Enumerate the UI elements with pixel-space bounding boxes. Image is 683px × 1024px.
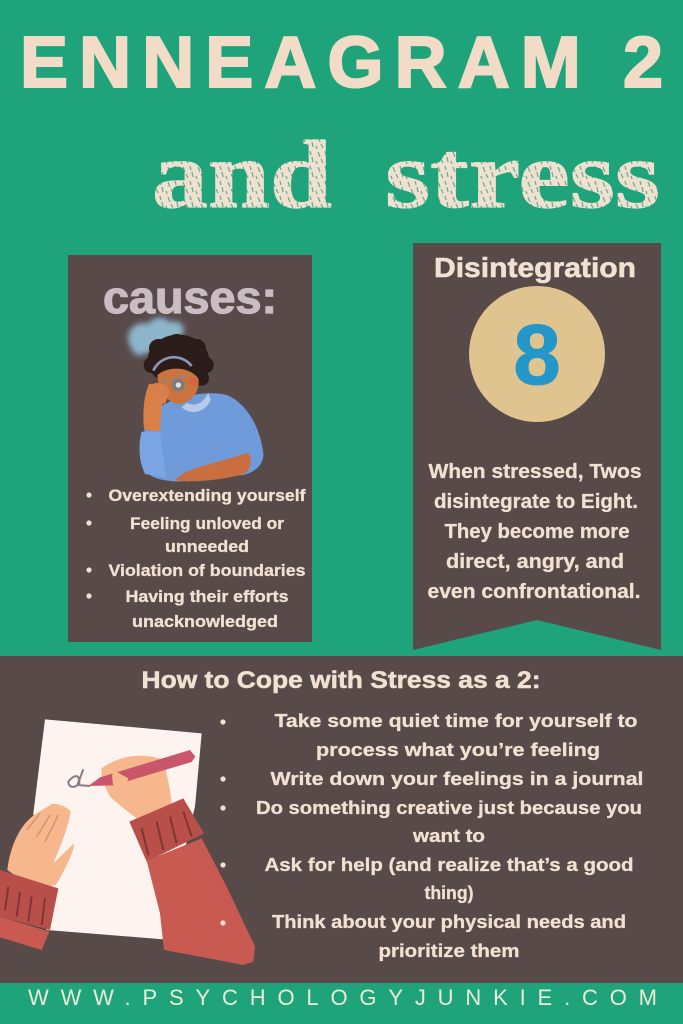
subtitle: and stress: [152, 121, 660, 228]
heading: disintegration: Disintegration: [434, 252, 636, 283]
badge: number 8: [469, 286, 605, 422]
list: coping strategies: Do something creative just because you: [256, 797, 642, 818]
title: Enneagram 2: ENNEAGRAM 2: [20, 23, 663, 103]
panel: how to cope: [0, 656, 683, 983]
panel: disintegration banner: [413, 243, 661, 650]
list: coping strategies: Think about your physical needs and: [272, 911, 626, 932]
heading: how to cope: How to Cope with Stress as a 2:: [142, 667, 540, 694]
subtitle: and stress: and: [152, 121, 332, 228]
list: coping strategies: process what you’re feeling: [316, 739, 600, 760]
subtitle: and stress: stress: [385, 121, 660, 228]
list: coping strategies: Take some quiet time for yourself to: [274, 710, 638, 731]
list: causes: Feeling unloved or: [130, 515, 285, 533]
panel: causes: [68, 255, 312, 642]
text: disintegration description: When stressed, Twos: [428, 461, 642, 483]
list: causes: unacknowledged: [132, 613, 278, 631]
list: coping strategies: want to: [412, 825, 485, 846]
list: causes: unneeded: [165, 538, 249, 556]
text: disintegration description: disintegrate to Eight.: [434, 491, 638, 513]
list: coping strategies: thing): [424, 882, 474, 903]
text: disintegration description: They become more: [444, 521, 630, 543]
list: causes: Violation of boundaries: [108, 562, 306, 580]
text: disintegration description: [428, 461, 642, 603]
icon: stressed woman with cloud: [128, 318, 263, 482]
list: coping strategies: Write down your feelings in a journal: [270, 768, 644, 789]
badge: number 8: 8: [513, 308, 561, 403]
list: coping strategies: [220, 710, 644, 961]
list: coping strategies: prioritize them: [378, 940, 520, 961]
list: causes: Overextending yourself: [108, 487, 306, 505]
text: disintegration description: direct, angry, and: [446, 551, 624, 573]
list: causes: [86, 487, 306, 631]
text: disintegration description: even confrontational.: [428, 581, 640, 603]
list: causes: Having their efforts: [126, 588, 288, 606]
list: coping strategies: Ask for help (and realize that’s a good: [264, 854, 634, 875]
icon: hands writing on paper: [0, 719, 255, 965]
footer: website: WWW.PSYCHOLOGYJUNKIE.COM: [28, 985, 657, 1010]
heading: causes: causes:: [103, 272, 277, 323]
